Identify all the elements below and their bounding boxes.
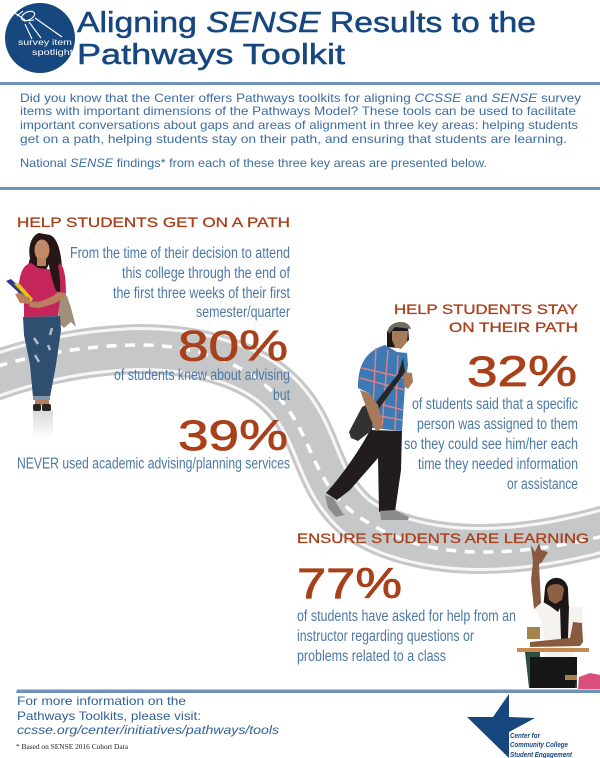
description: semester/quarter: [196, 304, 290, 321]
title: Pathways Toolkit: [77, 39, 345, 71]
description: of students have asked for help from an: [297, 608, 516, 625]
logo badge: survey item spotlight: [5, 3, 75, 73]
footer link text: Pathways Toolkits, please visit:: [17, 709, 201, 723]
description: [297, 608, 516, 665]
road illustration: [0, 345, 600, 552]
advising note: [114, 367, 291, 404]
description: this college through the end of: [122, 265, 291, 282]
footer divider: [16, 690, 600, 693]
panel: ensure students are learning: [297, 530, 589, 665]
intro text: items with important dimensions of the Pathways Model? These tools can be used to facilitate: [20, 105, 576, 118]
heading: ENSURE STUDENTS ARE LEARNING: [297, 530, 589, 546]
advising note: of students knew about advising: [114, 367, 290, 384]
panel: help students get on a path: [17, 214, 291, 472]
footnote: * Based on SENSE 2016 Cohort Data: [16, 743, 129, 751]
intro text: [20, 92, 581, 170]
description: the first three weeks of their first: [113, 285, 291, 302]
heading: ON THEIR PATH: [449, 319, 578, 335]
logo badge: survey item spotlight: survey item: [18, 37, 72, 47]
footer link text: ccsse.org/center/initiatives/pathways/tools: [17, 723, 279, 737]
intro text: get on a path, helping students stay on their path, and ensuring that students are learning.: [20, 133, 567, 146]
never used note: NEVER used academic advising/planning services: [17, 456, 290, 472]
intro text: National SENSE findings* from each of these three key areas are presented below.: [20, 157, 487, 170]
logo: Center for Community College Student Engagement: [467, 694, 572, 758]
heading: [394, 301, 579, 335]
heading: HELP STUDENTS GET ON A PATH: [17, 214, 290, 230]
description: instructor regarding questions or: [297, 628, 474, 645]
title: Aligning SENSE Results to the: [77, 7, 536, 39]
advising note: but: [273, 387, 291, 404]
stat 32%: 32%: [467, 348, 577, 396]
photo: student with books: [6, 233, 76, 438]
stat 39%: 39%: [178, 412, 288, 460]
logo: Center for Community College Student Engagement: Center for: [510, 731, 541, 740]
footer link text: For more information on the: [17, 694, 186, 708]
description: [404, 396, 578, 493]
description: [70, 245, 291, 321]
intro text: Did you know that the Center offers Pathways toolkits for aligning CCSSE and SENSE survey: [20, 92, 581, 105]
photo: student raising hand at desk: [517, 543, 600, 689]
heading: HELP STUDENTS STAY: [394, 301, 579, 317]
footer link text: [17, 694, 279, 737]
description: or assistance: [507, 476, 578, 493]
stat 80%: 80%: [178, 322, 288, 370]
stat 77%: 77%: [297, 560, 402, 608]
title: [77, 7, 536, 71]
photo: student with messenger bag: [325, 322, 413, 520]
intro text: important conversations about gaps and areas of alignment in three key areas: helping students: [20, 119, 578, 132]
panel: help students stay on their path: [394, 301, 579, 493]
description: From the time of their decision to attend: [70, 245, 290, 262]
logo badge: survey item spotlight: spotlight: [32, 47, 74, 57]
description: problems related to a class: [297, 648, 446, 665]
logo: Center for Community College Student Engagement: Community College: [510, 740, 568, 749]
